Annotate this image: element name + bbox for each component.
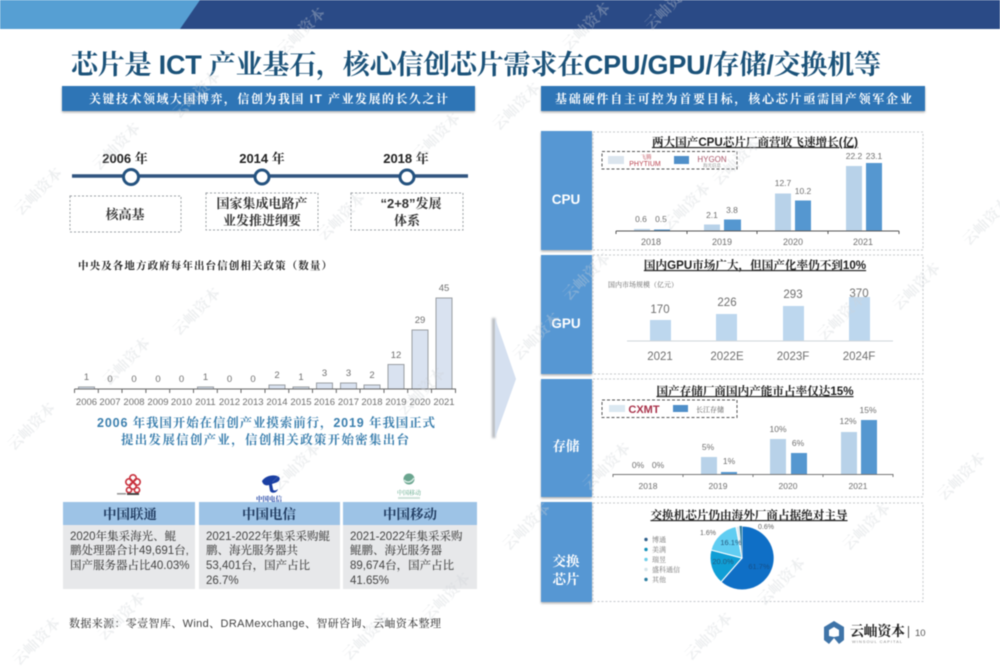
CPU side tab [541, 131, 592, 250]
policy bar chart: 0 [179, 374, 184, 385]
storage bars: 2019 [709, 481, 728, 491]
CPU legend: HYGON [697, 155, 727, 164]
watermarks: 云岫资本 [339, 609, 394, 664]
policy bar chart: 2006 [76, 397, 97, 408]
CPU legend: 海光信息 [703, 162, 721, 169]
timeline node 2006 [70, 151, 181, 232]
storage bars: 2018 [639, 481, 658, 491]
watermarks: 云岫资本 [754, 554, 809, 609]
pie chart [700, 524, 774, 590]
switch chart title: 交换机芯片仍由海外厂商占据绝对主导 [650, 508, 848, 522]
policy bar chart: 2011 [195, 397, 216, 408]
watermarks: 云岫资本 [89, 119, 144, 174]
policy bar chart: 45 [439, 283, 449, 294]
operator table: China Unicom [63, 502, 195, 589]
policy bar chart: 2008 [123, 397, 145, 408]
switch side tab: 芯片 [552, 571, 580, 587]
GPU chart title: 国内GPU市场广大，但国产化率仍不到10% [644, 258, 866, 272]
timeline [70, 151, 468, 232]
CPU bars: 2018 [641, 237, 661, 247]
operator table: China Telecom: 2021-2022年集采采购鲲 [206, 529, 330, 543]
timeline node 2014: 2014 年 [239, 151, 285, 166]
chart caption [97, 415, 435, 447]
policy chart heading: 中央及各地方政府每年出台信创相关政策（数量） [78, 259, 332, 272]
watermarks: 云岫资本 [559, 0, 614, 54]
watermarks: 云岫资本 [94, 589, 149, 644]
watermarks: 云岫资本 [839, 499, 894, 554]
policy bar chart: 29 [415, 315, 425, 326]
policy bar chart: 1 [298, 372, 304, 383]
storage chart title: 国产存储厂商国内产能市占率仅达15% [656, 384, 854, 398]
operator table: China Telecom: 中国电信 [242, 506, 296, 522]
policy bar chart: 1 [84, 372, 89, 383]
policy bar chart: 2012 [219, 397, 240, 408]
storage side tab: 存储 [552, 438, 580, 454]
policy bar chart: 0 [250, 374, 256, 385]
CPU bars: 2019 [712, 237, 732, 247]
operator table: China Unicom: 国产服务器占比40.03% [70, 558, 190, 572]
policy bar chart: 2007 [99, 397, 121, 408]
GPU bars: 2023F [777, 351, 809, 363]
watermarks: 云岫资本 [11, 164, 66, 219]
operator table: China Telecom: 鹏、海光服务器共 [206, 543, 298, 557]
right header banner: 基础硬件自主可控为首要目标，核心芯片亟需国产领军企业 [555, 91, 912, 106]
policy bar chart [74, 283, 456, 408]
watermarks: 云岫资本 [814, 289, 869, 344]
storage side tab [541, 379, 592, 497]
watermarks: 云岫资本 [419, 569, 474, 624]
policy bar chart: 2019 [385, 397, 407, 408]
icon: China Telecom logo [256, 475, 282, 503]
title: 芯片是 ICT 产业基石，核心信创芯片需求在CPU/GPU/存储/交换机等 [69, 49, 881, 81]
switch side tab [541, 502, 592, 602]
pie chart: 61.7% [748, 562, 770, 571]
icon: China Mobile logo: 中国移动 [397, 489, 421, 497]
policy bar chart: 2017 [338, 397, 359, 408]
company logo and page number [824, 621, 926, 644]
timeline node 2014 [206, 151, 318, 230]
CPU bars: 0.6 [635, 214, 647, 224]
storage bars [613, 405, 893, 491]
pie legend: 博通 [652, 535, 666, 544]
CPU bars: 10.2 [795, 186, 812, 196]
policy bar chart: 2018 [361, 397, 383, 408]
left header banner: 关键技术领域大国博弈，信创为我国 IT 产业发展的长久之计 [89, 91, 448, 106]
panel: switch chips [541, 502, 923, 602]
storage bars: 6% [792, 438, 805, 448]
policy bar chart: 2015 [290, 397, 312, 408]
GPU bars: 2024F [843, 351, 875, 363]
watermarks: 云岫资本 [409, 109, 464, 164]
timeline node 2018: “2+8”发展 [380, 196, 442, 211]
watermarks: 云岫资本 [394, 364, 449, 419]
policy bar chart: 2021 [433, 397, 455, 408]
watermarks: 云岫资本 [169, 67, 224, 122]
operator table: China Unicom: 中国联通 [103, 506, 157, 522]
policy bar chart: 1 [203, 372, 208, 383]
pie chart: 0.6% [758, 524, 774, 531]
data source note: 数据来源：零壹智库、Wind、DRAMexchange、智研咨询、云岫资本整理 [69, 616, 441, 630]
watermarks: 云岫资本 [4, 399, 59, 454]
policy bar chart: 3 [322, 368, 327, 379]
CPU bars: 0.5 [655, 214, 667, 224]
watermarks: 云岫资本 [579, 439, 634, 494]
CPU bars [616, 151, 899, 247]
pie chart: 1.6% [700, 530, 716, 537]
storage legend: CXMT [628, 404, 660, 416]
timeline node 2018: 体系 [394, 213, 421, 228]
panel: CPU [541, 131, 923, 250]
policy bar chart: 2 [274, 370, 280, 381]
watermarks: 云岫资本 [709, 134, 764, 189]
policy bar chart: 0 [227, 374, 232, 385]
storage bars: 2021 [849, 481, 868, 491]
chart caption: 提出发展信创产业，信创相关政策开始密集出台 [121, 432, 409, 447]
watermarks: 云岫资本 [269, 439, 324, 494]
CPU bars: 2.1 [706, 210, 718, 220]
CPU side tab: CPU [552, 192, 580, 207]
watermarks: 云岫资本 [559, 249, 614, 304]
timeline node 2018: 2018 年 [383, 151, 429, 166]
icon: China Unicom logo [117, 475, 140, 495]
pie legend: 其他 [652, 575, 666, 584]
operator table: China Mobile: 41.65% [350, 575, 389, 587]
operator table: China Unicom: 鹏处理器合计49,691台, [70, 543, 189, 557]
CPU chart title: 两大国产CPU芯片厂商营收飞速增长(亿) [652, 135, 858, 149]
operator table: China Telecom: 53,401台，国产占比 [206, 558, 311, 572]
arrow between columns [492, 318, 516, 438]
operator table: China Mobile: 鲲鹏、海光服务器 [350, 543, 442, 557]
CPU bars: 2020 [783, 237, 803, 247]
storage legend [602, 400, 737, 418]
switch side tab: 交换 [552, 553, 580, 569]
storage bars: 5% [702, 442, 715, 452]
pie legend: 瑞昱 [652, 555, 666, 564]
policy bar chart: 0 [131, 374, 137, 385]
icon: China Mobile logo [397, 474, 421, 499]
storage bars: 12% [839, 416, 857, 426]
watermarks: 云岫资本 [99, 334, 154, 389]
GPU bars: 293 [783, 289, 803, 301]
pie legend: 美满 [652, 545, 666, 554]
chart caption: 2006 年我国开始在信创产业摸索前行，2019 年我国正式 [97, 415, 435, 430]
watermarks: 云岫资本 [509, 309, 564, 364]
storage legend: 长江存储 [696, 405, 724, 414]
watermarks: 云岫资本 [889, 259, 944, 314]
CPU bars: 3.8 [726, 205, 738, 215]
operator table: China Mobile: 中国移动 [383, 506, 437, 522]
timeline node 2018 [351, 151, 463, 230]
operator table: China Mobile: 2021-2022年集采采购 [350, 529, 463, 543]
top banner [0, 0, 1000, 29]
GPU bars: 2021 [647, 351, 673, 363]
CPU bars: 23.1 [866, 151, 883, 161]
CPU bars: 2021 [853, 237, 873, 247]
watermarks: 云岫资本 [681, 609, 736, 664]
policy bar chart: 0 [107, 374, 113, 385]
policy bar chart: 3 [346, 368, 351, 379]
company logo and page number: 云岫资本 [850, 623, 905, 640]
policy bar chart: 2014 [266, 397, 288, 408]
policy bar chart: 2013 [242, 397, 264, 408]
watermarks: 云岫资本 [934, 449, 989, 504]
pie chart: 20.0% [712, 557, 734, 566]
pie chart: 16.1% [720, 538, 742, 547]
timeline node 2006: 核高基 [105, 207, 145, 222]
CPU legend: 飞腾 [640, 153, 652, 161]
GPU bars: 226 [717, 297, 737, 309]
GPU side tab [541, 255, 592, 374]
GPU side tab: GPU [551, 316, 581, 331]
policy bar chart: 2 [369, 370, 375, 381]
policy bar chart: 2016 [314, 397, 335, 408]
watermarks: 云岫资本 [314, 189, 369, 244]
watermarks: 云岫资本 [274, 4, 329, 59]
CPU bars: 22.2 [846, 151, 863, 161]
operator table: China Mobile: 89,674台，国产占比 [350, 558, 455, 572]
timeline node 2006: 2006 年 [102, 151, 148, 166]
GPU bars: 170 [650, 304, 670, 316]
storage bars: 10% [769, 424, 787, 434]
pie legend: 盛科通信 [652, 565, 680, 574]
policy bar chart: 2010 [171, 397, 192, 408]
CPU bars: 12.7 [775, 178, 792, 188]
pie legend [644, 535, 680, 584]
timeline node 2014: 国家集成电路产 [216, 196, 308, 211]
left header banner [62, 86, 475, 111]
GPU bars [627, 288, 893, 363]
operator table: China Mobile [343, 502, 477, 589]
operator table: China Telecom: 26.7% [206, 575, 239, 587]
icon: China Telecom logo: 中国电信 [256, 494, 282, 503]
watermarks: 云岫资本 [169, 284, 224, 339]
GPU bars: 370 [849, 288, 869, 300]
CPU legend [602, 152, 737, 169]
right header banner [541, 86, 925, 111]
policy bar chart: 2020 [409, 397, 431, 408]
panel: storage [541, 379, 923, 497]
company logo and page number: 10 [915, 628, 926, 639]
panel: GPU [541, 255, 923, 374]
operator table: China Unicom: 2020年集采海光、鲲 [70, 529, 177, 543]
storage bars: 1% [723, 456, 736, 466]
policy bar chart: 0 [155, 374, 161, 385]
watermarks: 云岫资本 [659, 179, 714, 234]
company logo and page number: WINSOUL CAPITAL [852, 639, 903, 644]
policy bar chart: 12 [391, 350, 401, 361]
timeline node 2014: 业发推进纲要 [223, 213, 302, 228]
storage bars: 0% [632, 460, 645, 470]
storage bars: 0% [652, 460, 665, 470]
watermarks: 云岫资本 [499, 499, 554, 554]
storage bars: 2020 [779, 481, 798, 491]
GPU chart subtitle: 国内市场规模（亿元） [608, 280, 678, 289]
storage bars: 15% [859, 405, 877, 415]
policy bar chart: 2009 [147, 397, 169, 408]
operator table: China Telecom [199, 502, 340, 589]
logo icon [824, 621, 844, 644]
CPU legend: PHYTIUM [629, 161, 661, 168]
GPU bars: 2022E [710, 351, 744, 363]
watermarks: 云岫资本 [489, 79, 544, 134]
